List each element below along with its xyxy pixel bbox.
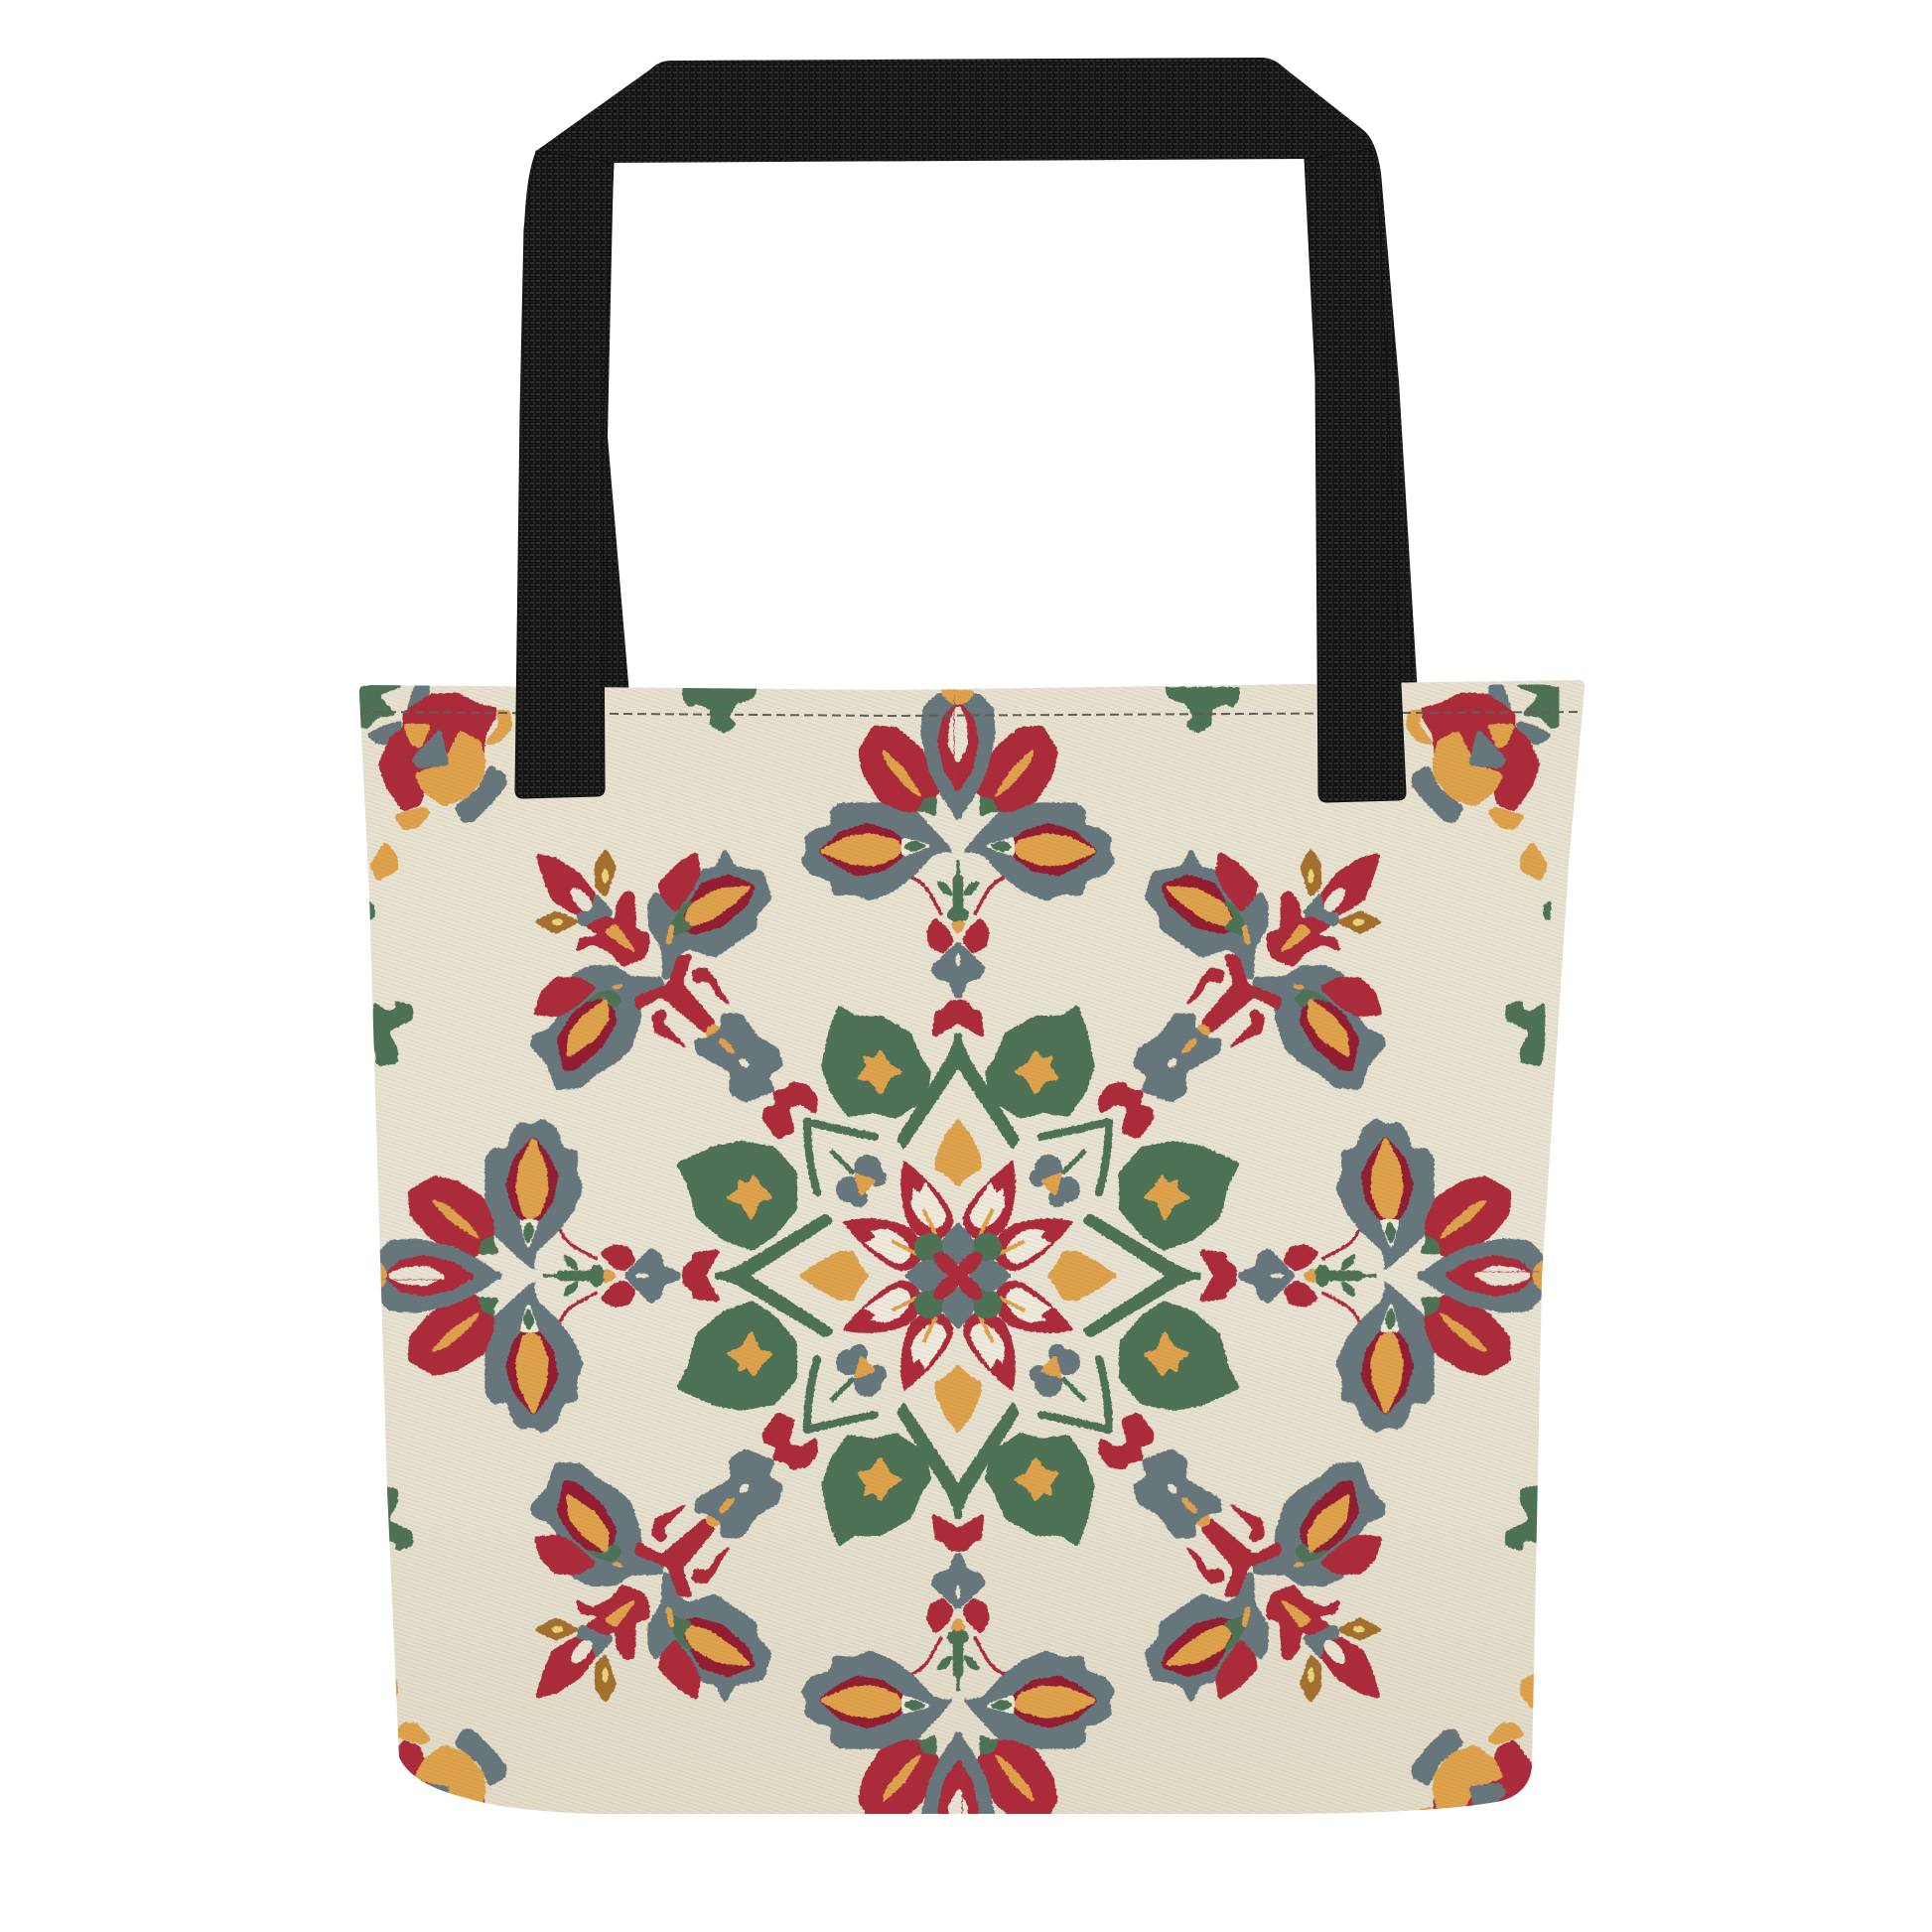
tote bag illustration: [359, 58, 1585, 1814]
corner ornaments and edge sprigs: [359, 685, 1559, 1866]
fabric twill texture: [338, 665, 1618, 1837]
bag body: [338, 665, 1618, 1866]
diagonal floral sprays: [531, 849, 1385, 1703]
top hem stitching: [359, 712, 1585, 716]
central rosette with leaves: [677, 1006, 1239, 1546]
handle straps behind the bag: [518, 58, 1418, 695]
left front strap: [515, 151, 614, 798]
axial floral bouquets: [372, 690, 1547, 1862]
floral pattern: [359, 685, 1559, 1866]
green sprigs at the top edge: [683, 688, 1239, 733]
right front strap: [1305, 149, 1406, 802]
